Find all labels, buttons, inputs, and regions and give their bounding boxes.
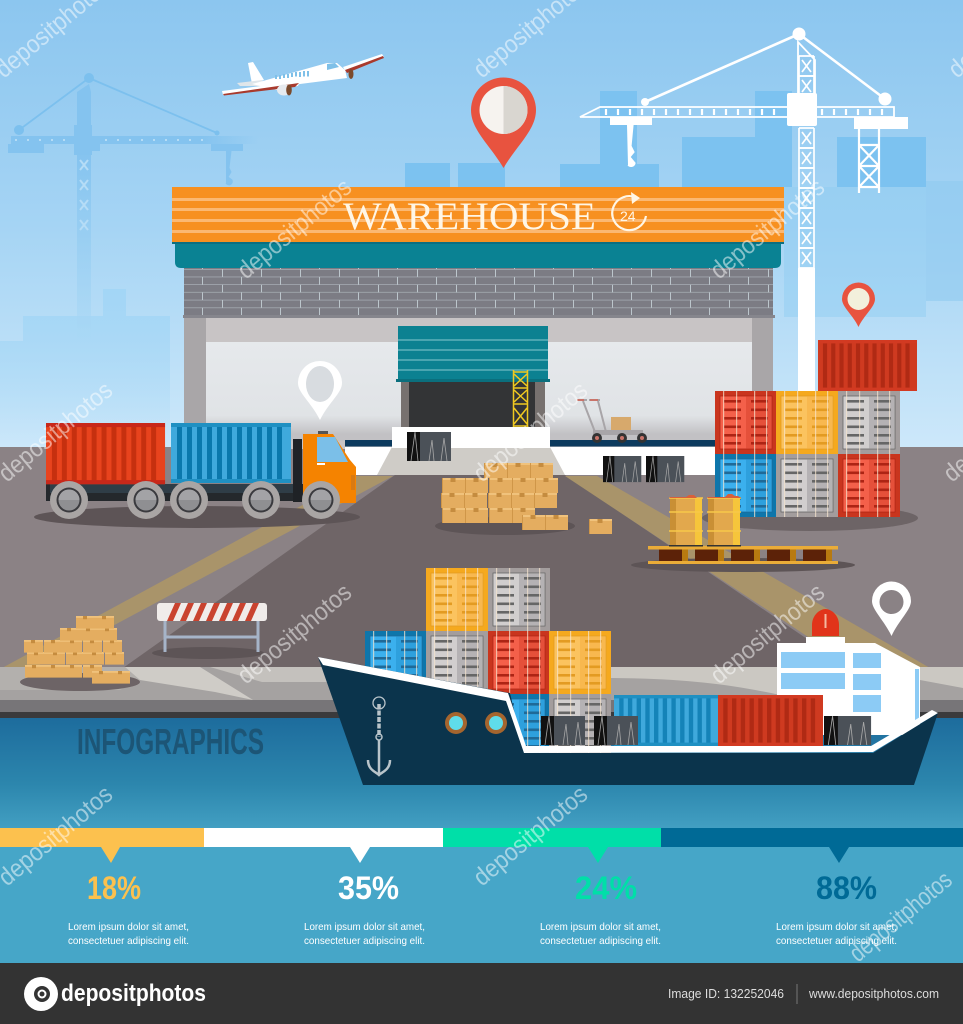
segment 88 percent: Lorem ipsum dolor sit amet, — [776, 921, 897, 933]
white loading base — [345, 447, 717, 475]
footer bar — [0, 963, 963, 1024]
hull — [318, 657, 938, 785]
watermarks: depositphotos — [232, 578, 357, 690]
sky background — [0, 0, 963, 450]
airplane — [222, 54, 384, 96]
containers on ship — [365, 568, 823, 757]
site url: www.depositphotos.com — [808, 987, 939, 1001]
white location pin above ship — [872, 582, 911, 636]
pallet with barrels — [631, 494, 855, 572]
city skyline — [0, 91, 963, 447]
segment 88 percent: consectetuer adipiscing elit. — [776, 935, 897, 947]
segment 18 percent: consectetuer adipiscing elit. — [68, 935, 189, 947]
left box pile — [20, 616, 140, 691]
statistics panel — [0, 828, 963, 963]
warehouse building — [172, 187, 784, 482]
barrels — [669, 494, 741, 546]
loading dock ramp — [377, 427, 565, 475]
segment 35 percent: 35% — [338, 870, 399, 906]
blue container — [171, 423, 291, 483]
segment 24 percent: 24% — [575, 870, 637, 906]
segment 35 percent: Lorem ipsum dolor sit amet, — [304, 921, 425, 933]
segment 24 percent — [443, 828, 661, 947]
hand trolley — [577, 400, 647, 443]
watermarks: depositphotos — [468, 376, 593, 488]
24 hour clock icon: 24 — [620, 208, 636, 224]
red pin on container stack — [842, 282, 875, 327]
segment 18 percent: Lorem ipsum dolor sit amet, — [68, 921, 189, 933]
road barrier — [152, 603, 267, 659]
dock bumper tires — [407, 432, 684, 482]
infographics heading: INFOGRAPHICS — [77, 721, 264, 762]
segment 88 percent: 88% — [816, 870, 877, 906]
watermarks: depositphotos — [705, 578, 830, 690]
yellow ladder — [514, 370, 528, 428]
red container — [46, 423, 165, 484]
brick frieze — [184, 268, 773, 318]
deck tires — [541, 716, 871, 745]
orange sign board — [172, 187, 784, 244]
truck — [34, 423, 360, 528]
watermarks: depositphotos — [232, 173, 357, 285]
white location pin over truck — [298, 361, 342, 420]
segment 35 percent — [204, 828, 443, 947]
portholes — [445, 712, 507, 734]
watermarks: depositphotos — [468, 780, 593, 892]
truck cab — [293, 431, 356, 503]
teal awning — [175, 243, 781, 268]
warehouse wall — [184, 317, 773, 449]
large location pin — [471, 78, 536, 168]
ship bridge — [777, 609, 920, 735]
depositphotos logo — [24, 977, 206, 1011]
hull white trim — [318, 657, 938, 753]
single box — [589, 519, 612, 534]
container stack on yard — [702, 340, 918, 531]
left background crane — [8, 73, 258, 340]
water — [0, 718, 963, 828]
image id: Image ID: 132252046 — [668, 987, 784, 1001]
segment 35 percent: consectetuer adipiscing elit. — [304, 935, 425, 947]
segment 24 percent: consectetuer adipiscing elit. — [540, 935, 661, 947]
loading door — [396, 326, 550, 428]
central cardboard box heap — [435, 463, 575, 535]
right tower crane — [580, 28, 908, 391]
segment 88 percent — [661, 828, 963, 947]
cargo ship — [318, 568, 938, 785]
segment 18 percent — [0, 828, 204, 947]
truck wheels — [50, 481, 340, 519]
24 hour clock icon — [612, 192, 646, 230]
truck chassis — [46, 484, 304, 501]
segment 24 percent: Lorem ipsum dolor sit amet, — [540, 921, 661, 933]
road and yard surface — [0, 447, 963, 668]
anchor — [368, 697, 390, 775]
concrete quay — [0, 667, 963, 718]
depositphotos logo: depositphotos — [61, 980, 206, 1007]
segment 18 percent: 18% — [87, 870, 141, 906]
watermarks: depositphotos — [705, 173, 830, 285]
warehouse title: WAREHOUSE — [343, 195, 596, 238]
navy base strip — [345, 440, 715, 446]
